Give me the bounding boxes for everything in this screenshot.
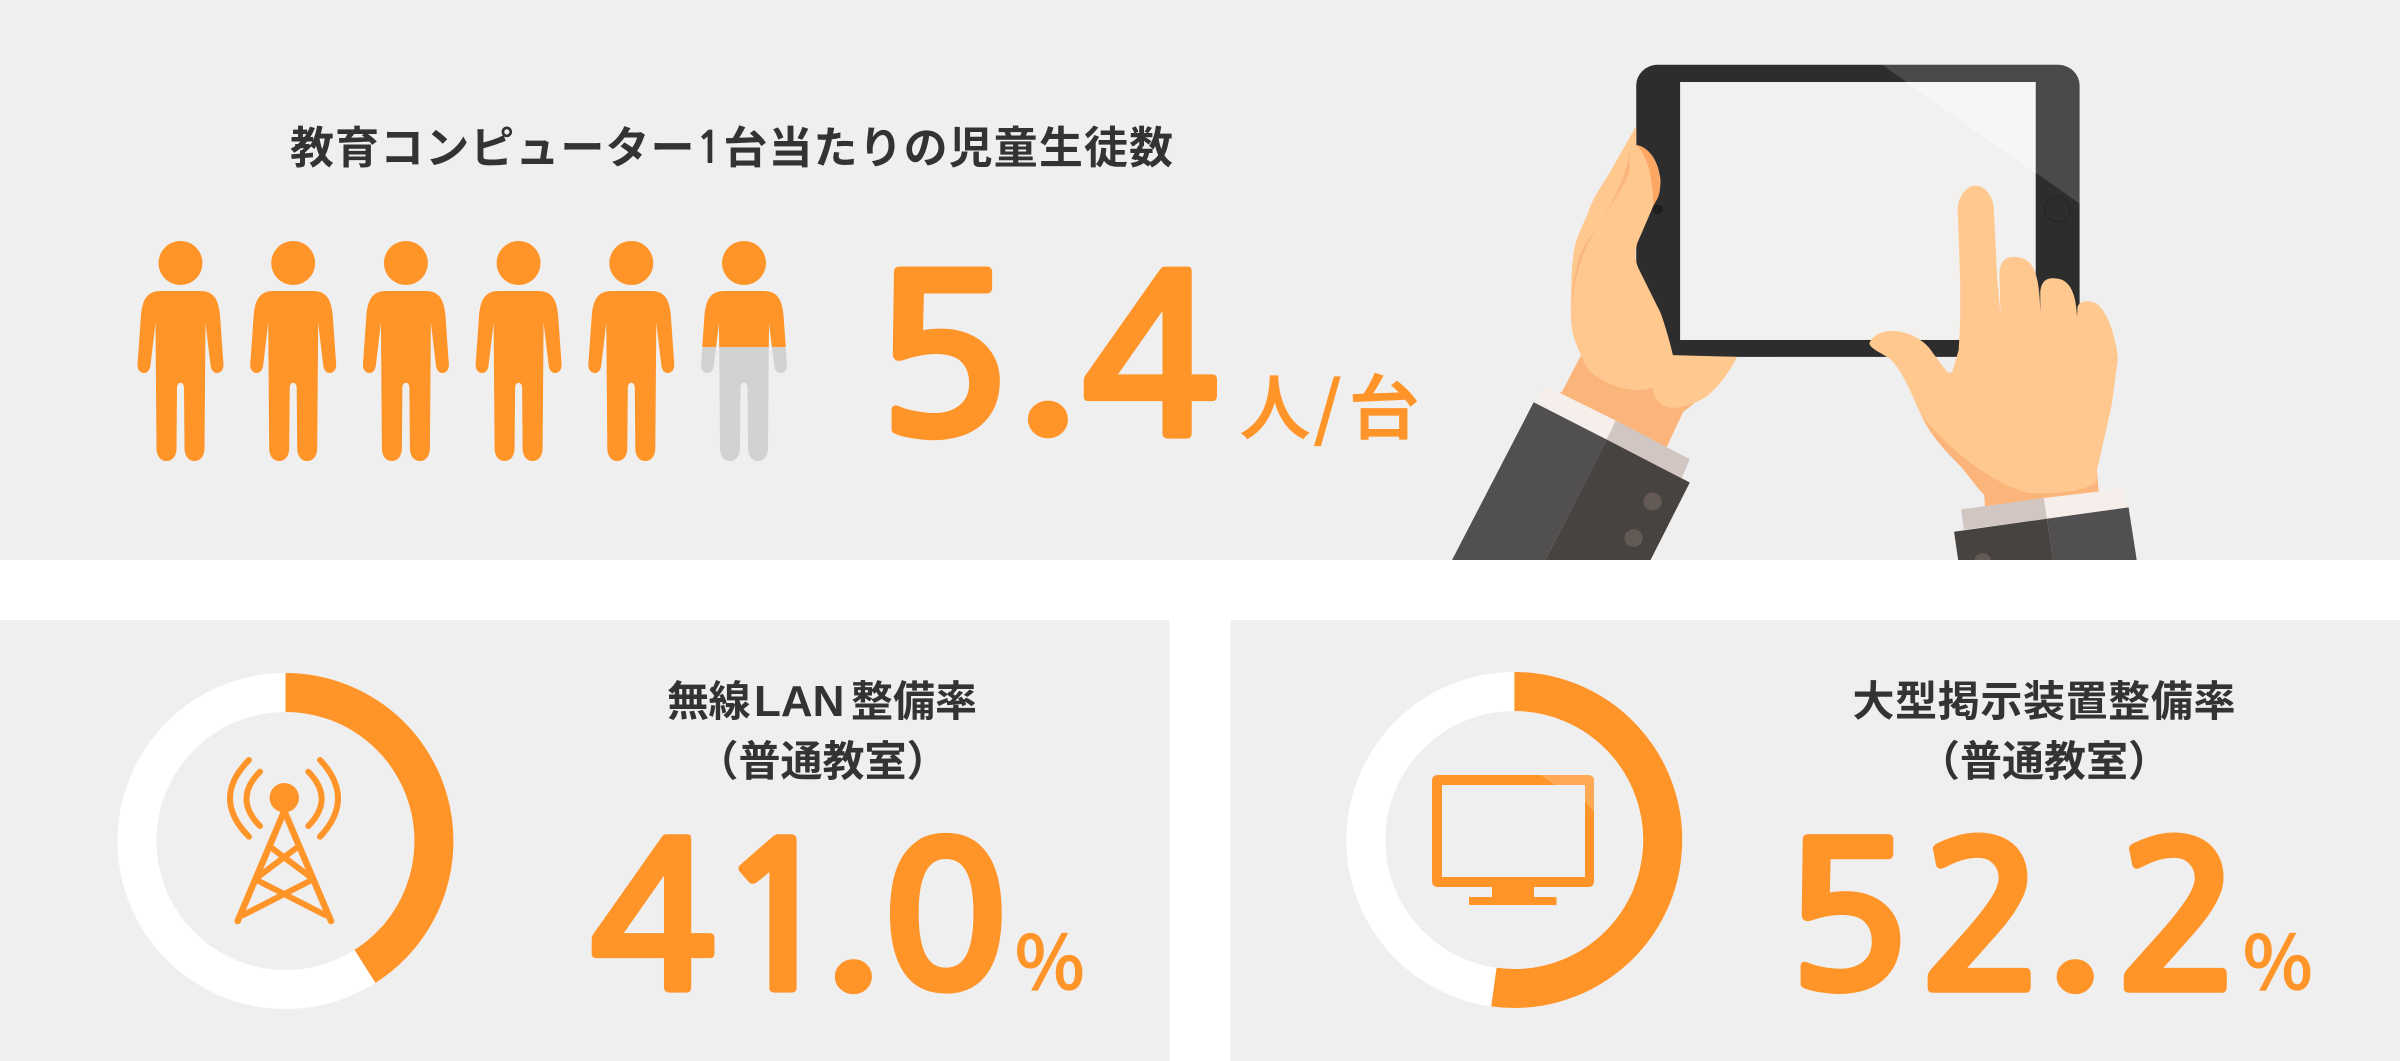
person 2 <box>250 241 336 461</box>
right hand and sleeve <box>1869 186 2137 560</box>
subheading: ordinary classrooms: （普通教室） <box>1918 728 2170 789</box>
subheading: ordinary classrooms: （普通教室） <box>696 728 949 789</box>
value: 5.4: 5.4 <box>871 236 1221 469</box>
title: 教育コンピューター1台当たりの児童生徒数 <box>290 112 1173 176</box>
person 1 <box>138 241 224 461</box>
panel: wireless LAN rate <box>0 620 1170 1061</box>
unit: per device: 人/台 <box>1240 353 1419 454</box>
left hand and sleeve <box>1452 126 1737 560</box>
illustration: hands holding a tablet <box>1452 65 2137 560</box>
heading: wireless LAN: 整備率 <box>851 668 977 729</box>
heading: large display devices: 大型掲示装置整備率 <box>1852 668 2236 729</box>
heading: wireless LAN: LAN <box>754 677 844 726</box>
percent sign: % <box>2243 904 2312 1011</box>
pictogram: six people <box>138 241 787 461</box>
person 4 <box>476 241 562 461</box>
panel: computers per student <box>0 0 2400 560</box>
percent sign: % <box>1015 904 1084 1011</box>
person 5 <box>588 241 674 461</box>
icon: antenna tower <box>230 760 338 921</box>
icon: monitor <box>1432 775 1594 905</box>
tablet <box>1636 65 2080 357</box>
panel: large display rate <box>1230 620 2400 1061</box>
person 6: partially filled <box>701 241 787 461</box>
person 3 <box>363 241 449 461</box>
donut chart: 52.2% <box>1366 692 1663 988</box>
value: 41.0: 41.0 <box>588 809 1010 1021</box>
heading: wireless LAN: 無線 <box>667 668 751 729</box>
value: 52.2: 52.2 <box>1782 809 2244 1021</box>
donut chart: 41.0% <box>137 692 434 990</box>
